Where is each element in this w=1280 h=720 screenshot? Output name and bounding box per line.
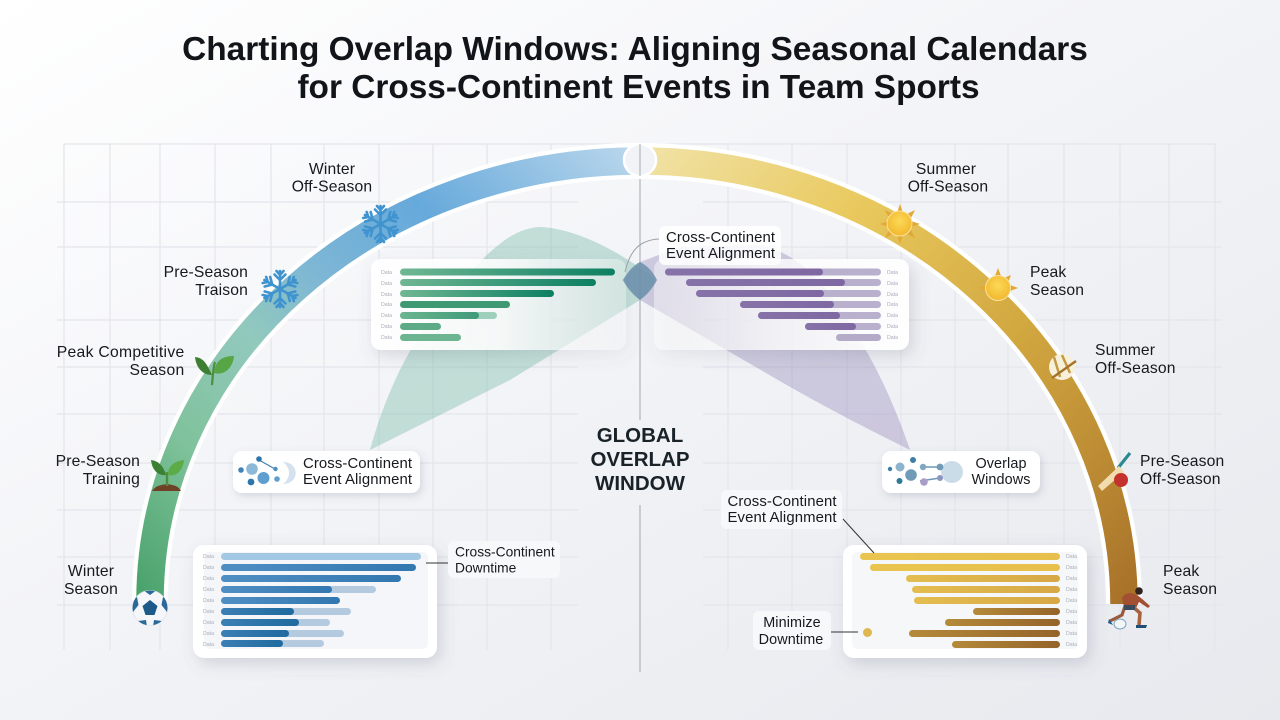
green row labels: Data: [381, 324, 392, 330]
chip: overlap windows: Windows: [971, 472, 1031, 488]
callout: cross-continent downtime: Downtime: [455, 560, 517, 576]
purple row labels: Data: [887, 281, 898, 287]
label: winter off-season: Off-Season: [292, 178, 372, 196]
label: peak season lower: Peak: [1163, 563, 1199, 580]
chip: overlap windows: [882, 451, 1040, 493]
callout: minimize downtime: Downtime: [759, 632, 823, 648]
blue row labels: Data: [203, 642, 214, 648]
blue row labels: Data: [203, 620, 214, 626]
gold row labels: Data: [1066, 576, 1077, 582]
center axis line: [639, 144, 641, 672]
gold marker dot: [863, 628, 872, 637]
green row labels: Data: [381, 313, 392, 319]
icon: sun lower: [979, 268, 1018, 306]
blue row labels: Data: [203, 576, 214, 582]
gold bars: [860, 553, 1060, 648]
label: pre-season training: Pre-Season: [56, 453, 140, 470]
gold row labels: Data: [1066, 620, 1077, 626]
blue row labels: Data: [203, 587, 214, 593]
purple bars: [665, 268, 881, 341]
gold row labels: Data: [1066, 587, 1077, 593]
panel: gold bar chart: [843, 545, 1087, 658]
label: summer off-season right: Summer: [1095, 342, 1155, 359]
heading: global overlap window: OVERLAP: [590, 448, 690, 471]
icon: overlap dots: [888, 457, 963, 486]
green row labels: Data: [381, 270, 392, 276]
callout: cross-continent event alignment (right): Event Alignment: [728, 510, 837, 526]
callout: cross-continent event alignment (right): Cross-Continent: [728, 494, 837, 510]
blue row labels: Data: [203, 609, 214, 615]
label: pre-season training: Training: [83, 471, 140, 488]
label: winter off-season: Winter: [309, 161, 355, 178]
label: winter season: Season: [64, 581, 118, 598]
gold row labels: Data: [1066, 609, 1077, 615]
callout: cross-continent downtime: Cross-Continent: [455, 544, 555, 560]
icon: snowflake lower: [262, 271, 298, 307]
purple row labels: Data: [887, 313, 898, 319]
heading: global overlap window: GLOBAL: [597, 424, 683, 447]
blue row labels: Data: [203, 565, 214, 571]
label: peak season lower: Season: [1163, 581, 1217, 598]
right seasonal arc: [640, 161, 1124, 604]
chip: cross-continent event alignment: Cross-Continent: [303, 456, 412, 472]
icon: cricket bat and ball: [1098, 453, 1130, 491]
blue row labels: [203, 554, 214, 648]
icon: leaf sprout: [195, 356, 234, 385]
purple row labels: Data: [887, 270, 898, 276]
label: summer off-season top: Summer: [916, 161, 976, 178]
icon: snowflake upper: [362, 206, 399, 242]
label: peak competitive season: Season: [129, 362, 184, 379]
blue bars: [221, 553, 421, 647]
label: winter season: Winter: [68, 563, 114, 580]
label: peak season upper: Season: [1030, 282, 1084, 299]
green row labels: Data: [381, 281, 392, 287]
label: summer off-season top: Off-Season: [908, 178, 988, 196]
purple row labels: [887, 270, 898, 341]
label: peak season upper: Peak: [1030, 264, 1066, 281]
left seasonal arc: [150, 161, 640, 600]
callout: cross-continent event alignment (top): Event Alignment: [666, 246, 776, 262]
gold panel inner: [852, 552, 1078, 649]
panel: blue bar chart: [193, 545, 437, 658]
gold row labels: Data: [1066, 631, 1077, 637]
blue row labels: Data: [203, 631, 214, 637]
gold row labels: Data: [1066, 598, 1077, 604]
purple row labels: Data: [887, 302, 898, 308]
title: Charting Overlap Windows: Aligning Seasonal Calendars: [182, 31, 1088, 68]
label: summer off-season right: Off-Season: [1095, 360, 1176, 377]
icon: network dots: [238, 456, 296, 485]
green overlap wedge: [370, 227, 657, 450]
chip: cross-continent event alignment: [233, 451, 420, 493]
icon: volleyball: [1049, 354, 1076, 380]
chip: cross-continent event alignment: Event Alignment: [303, 472, 413, 488]
panel: purple bar chart: [654, 259, 909, 350]
blue panel inner: [204, 552, 428, 649]
label: peak competitive season: Peak Competitive: [57, 344, 184, 361]
purple row labels: Data: [887, 292, 898, 298]
purple row labels: Data: [887, 335, 898, 341]
callout: cross-continent downtime: [426, 541, 560, 578]
icon: sprout with soil: [151, 460, 184, 491]
gold row labels: [1066, 554, 1077, 648]
title: for Cross-Continent Events in Team Sports: [297, 69, 980, 106]
top center node: [624, 144, 656, 176]
icon: soccer ball: [132, 590, 168, 626]
green row labels: Data: [381, 292, 392, 298]
background grid: [57, 144, 1222, 650]
gold row labels: Data: [1066, 554, 1077, 560]
blue row labels: Data: [203, 554, 214, 560]
label: pre-season traison: Pre-Season: [164, 264, 248, 281]
heading: global overlap window: WINDOW: [595, 472, 686, 495]
label: pre-season off-season: Pre-Season: [1140, 453, 1224, 470]
green bars: [400, 268, 615, 341]
callout: minimize downtime: Minimize: [763, 615, 821, 631]
green row labels: [381, 270, 392, 341]
purple row labels: Data: [887, 324, 898, 330]
panel: green bar chart: [371, 259, 626, 350]
gold row labels: Data: [1066, 565, 1077, 571]
blue row labels: Data: [203, 598, 214, 604]
callout: cross-continent event alignment (top): Cross-Continent: [666, 230, 775, 246]
label: pre-season traison: Traison: [195, 282, 248, 299]
overlap diamond: [623, 262, 657, 300]
callout: cross-continent event alignment (right): [721, 490, 874, 553]
gold row labels: Data: [1066, 642, 1077, 648]
icon: rugby player: [1108, 587, 1150, 629]
green row labels: Data: [381, 335, 392, 341]
callout: cross-continent event alignment (top): [625, 226, 781, 272]
green row labels: Data: [381, 302, 392, 308]
icon: sun upper: [880, 204, 920, 244]
purple overlap wedge: [622, 245, 910, 450]
callout: minimize downtime: [753, 611, 858, 650]
chip: overlap windows: Overlap: [975, 456, 1027, 472]
label: pre-season off-season: Off-Season: [1140, 471, 1221, 488]
